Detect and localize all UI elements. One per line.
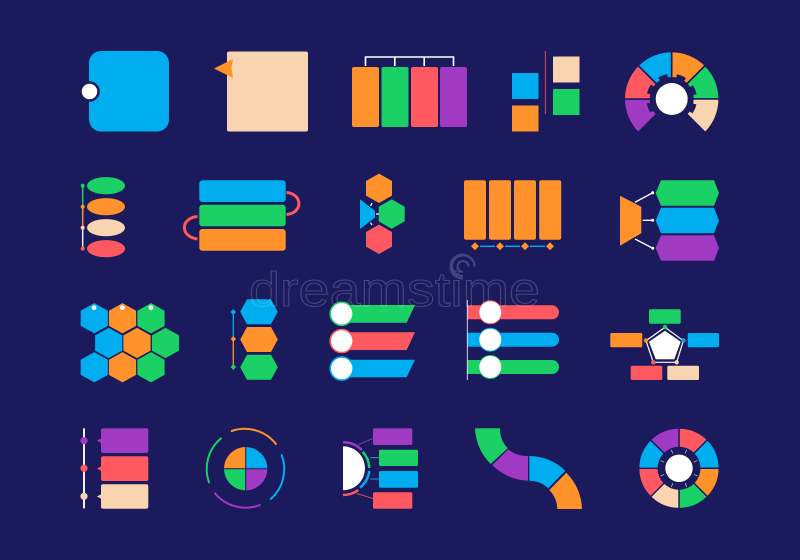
panel: four bars with bracket (352, 57, 467, 127)
panel: blue square with node (80, 51, 169, 132)
panel: half circle with four boxes (343, 428, 418, 509)
panel: stacked bars with loops (184, 180, 299, 251)
chart: quartered pie with outer arcs (207, 429, 284, 508)
chart: gear donut (624, 51, 719, 133)
panel: funnel with three hexagon bars (620, 180, 719, 261)
panel: slanted ribbons with circles (330, 302, 415, 380)
panel: three hexagons with timeline (231, 299, 278, 380)
panel: four orange columns with timeline (464, 180, 561, 250)
panel: pentagon hub with five boxes (610, 309, 719, 380)
panel: curved snake segments (475, 428, 582, 509)
watermark: dreamstime: dreamstime (249, 264, 540, 317)
panel: hexagon trio (360, 174, 405, 254)
panel: honeycomb grid (80, 303, 180, 383)
panel: ellipse timeline (81, 177, 125, 257)
panel: peach square with arrow (214, 52, 308, 132)
panel: staggered squares (512, 51, 580, 132)
panel: rounded bars with circles (467, 300, 559, 380)
panel: vertical timeline with three boxes (80, 428, 148, 509)
chart: eight segment donut (639, 428, 719, 509)
